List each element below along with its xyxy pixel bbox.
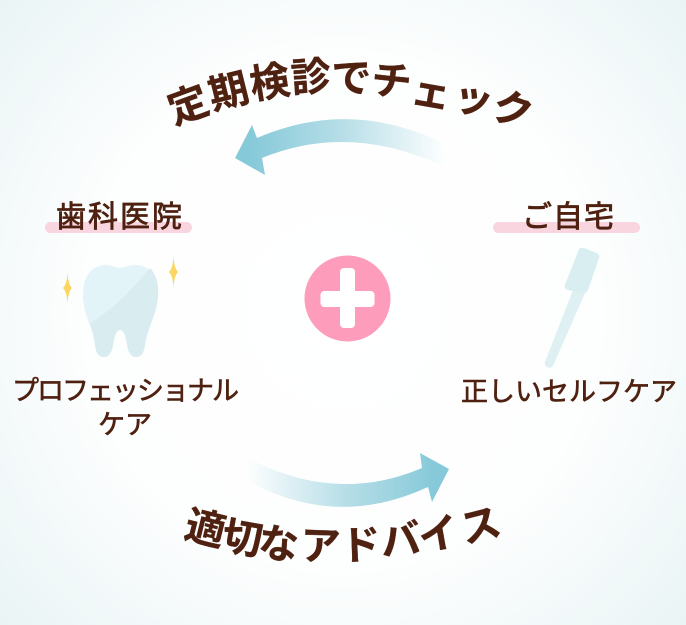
icon: toothbrush (545, 248, 599, 368)
icon: left sparkle (63, 272, 72, 304)
heading: curved top label: ク (486, 83, 538, 138)
text: professional care: ケア (98, 410, 152, 440)
text: proper self-care: 正しいセルフケア (461, 377, 677, 407)
panel: dental clinic (12, 201, 239, 440)
heading: curved top label: で (331, 57, 372, 101)
heading: curved bottom label: イ (415, 510, 462, 560)
heading: curved bottom label: な (256, 521, 301, 569)
heading: curved bottom label: 切 (219, 514, 266, 564)
heading: curved top label: 定 (162, 78, 215, 133)
panel: home (461, 201, 677, 407)
heading: curved bottom label: ア (300, 524, 341, 570)
icon: plus badge (304, 256, 390, 342)
heading: home: ご自宅 (522, 201, 614, 234)
heading: curved top label: 期 (204, 66, 254, 119)
heading: curved bottom label: ス (456, 500, 506, 553)
heading: curved top label (162, 55, 538, 138)
text: professional care: プロフェッショナル (12, 376, 239, 406)
arrow: top, pointing left (235, 119, 445, 175)
text: professional care (12, 376, 239, 440)
heading: curved top label: 診 (290, 55, 333, 101)
icon: right sparkle (169, 256, 178, 288)
heading: curved top label: ェ (408, 68, 455, 118)
heading: curved top label: ッ (448, 73, 498, 126)
heading: curved bottom label: 適 (180, 503, 230, 556)
label underline: dental clinic (45, 222, 192, 233)
heading: dental clinic: 歯科医院 (56, 201, 182, 234)
heading: curved bottom label: バ (378, 517, 423, 565)
heading: curved bottom label: ド (340, 523, 381, 569)
label underline: home (493, 222, 640, 233)
heading: curved top label: チ (369, 58, 414, 106)
arrow: bottom, pointing right (246, 453, 449, 507)
heading: curved top label: 検 (247, 58, 293, 108)
heading: curved bottom label (180, 500, 506, 570)
icon: tooth (83, 265, 158, 357)
